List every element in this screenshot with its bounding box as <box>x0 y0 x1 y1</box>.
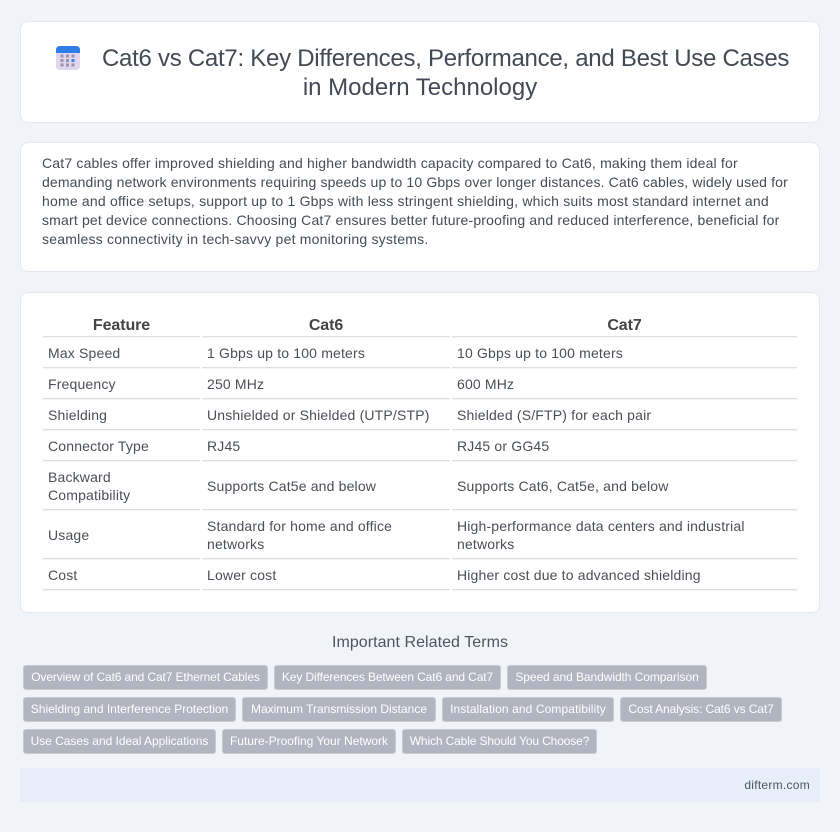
text block: summary: Cat7 cables offer improved shielding and higher bandwidth capacity compared to Cat6, making them ideal for <box>42 155 738 171</box>
text block: summary <box>42 155 788 247</box>
panel: summary paragraph <box>20 142 820 272</box>
comparison table: Frequency <box>48 376 116 392</box>
panel: title card <box>20 21 820 123</box>
tag list: Installation and Compatibility <box>450 702 606 716</box>
panel: comparison table <box>20 292 820 613</box>
comparison table: Connector Type <box>48 438 149 454</box>
comparison table: Supports Cat6, Cat5e, and below <box>457 478 669 494</box>
comparison table: Higher cost due to advanced shielding <box>457 567 701 583</box>
comparison table: Unshielded or Shielded (UTP/STP) <box>207 407 430 423</box>
text block: summary: home and office setups, support up to 1 Gbps with less stringent shielding, which suits most standard internet and <box>42 193 769 209</box>
comparison table: Cost <box>48 567 77 583</box>
comparison table: Cat7 <box>607 317 642 334</box>
comparison table: networks <box>207 536 264 552</box>
comparison table: 250 MHz <box>207 376 264 392</box>
comparison table: Feature <box>93 317 150 334</box>
comparison table: RJ45 <box>207 438 240 454</box>
tag list: Maximum Transmission Distance <box>251 702 427 716</box>
tag list: Shielding and Interference Protection <box>31 702 228 716</box>
tag list: Future-Proofing Your Network <box>230 734 388 748</box>
comparison table: Shielding <box>48 407 107 423</box>
tag list: Key Differences Between Cat6 and Cat7 <box>282 670 493 684</box>
comparison table: 10 Gbps up to 100 meters <box>457 345 623 361</box>
tag list: Overview of Cat6 and Cat7 Ethernet Cables <box>31 670 260 684</box>
title: in Modern Technology <box>303 74 537 101</box>
comparison table: Compatibility <box>48 487 130 503</box>
footer bar <box>20 768 820 802</box>
text block: summary: demanding network environments requiring speeds up to 10 Gbps over longer distances. Cat6 cables, widely used for <box>42 174 788 190</box>
title: Cat6 vs Cat7: Key Differences, Performance, and Best Use Cases <box>102 45 789 72</box>
comparison table: Max Speed <box>48 345 120 361</box>
text block: summary: smart pet device connections. Choosing Cat7 ensures better future-proofing and reduced interference, beneficial for <box>42 212 779 228</box>
footer credit: difterm.com <box>744 778 810 792</box>
heading: related terms: Important Related Terms <box>332 634 508 651</box>
comparison table: Cat6 <box>309 317 343 334</box>
tag list: Which Cable Should You Choose? <box>410 734 589 748</box>
comparison table: 1 Gbps up to 100 meters <box>207 345 365 361</box>
tag list: Speed and Bandwidth Comparison <box>515 670 699 684</box>
comparison table: networks <box>457 536 514 552</box>
tag list: Use Cases and Ideal Applications <box>31 734 208 748</box>
comparison table: Lower cost <box>207 567 276 583</box>
comparison table: Backward <box>48 469 111 485</box>
comparison table <box>43 317 797 591</box>
comparison table: High-performance data centers and industrial <box>457 518 745 534</box>
icon: calendar app <box>56 46 80 70</box>
comparison table: RJ45 or GG45 <box>457 438 549 454</box>
comparison table: Supports Cat5e and below <box>207 478 376 494</box>
title <box>102 45 789 101</box>
comparison table: Shielded (S/FTP) for each pair <box>457 407 651 423</box>
text block: summary: seamless connectivity in tech-savvy pet monitoring systems. <box>42 231 428 247</box>
comparison table: Standard for home and office <box>207 518 392 534</box>
comparison table: 600 MHz <box>457 376 514 392</box>
comparison table: Usage <box>48 527 89 543</box>
tag list: Cost Analysis: Cat6 vs Cat7 <box>628 702 774 716</box>
tag list <box>23 665 782 754</box>
